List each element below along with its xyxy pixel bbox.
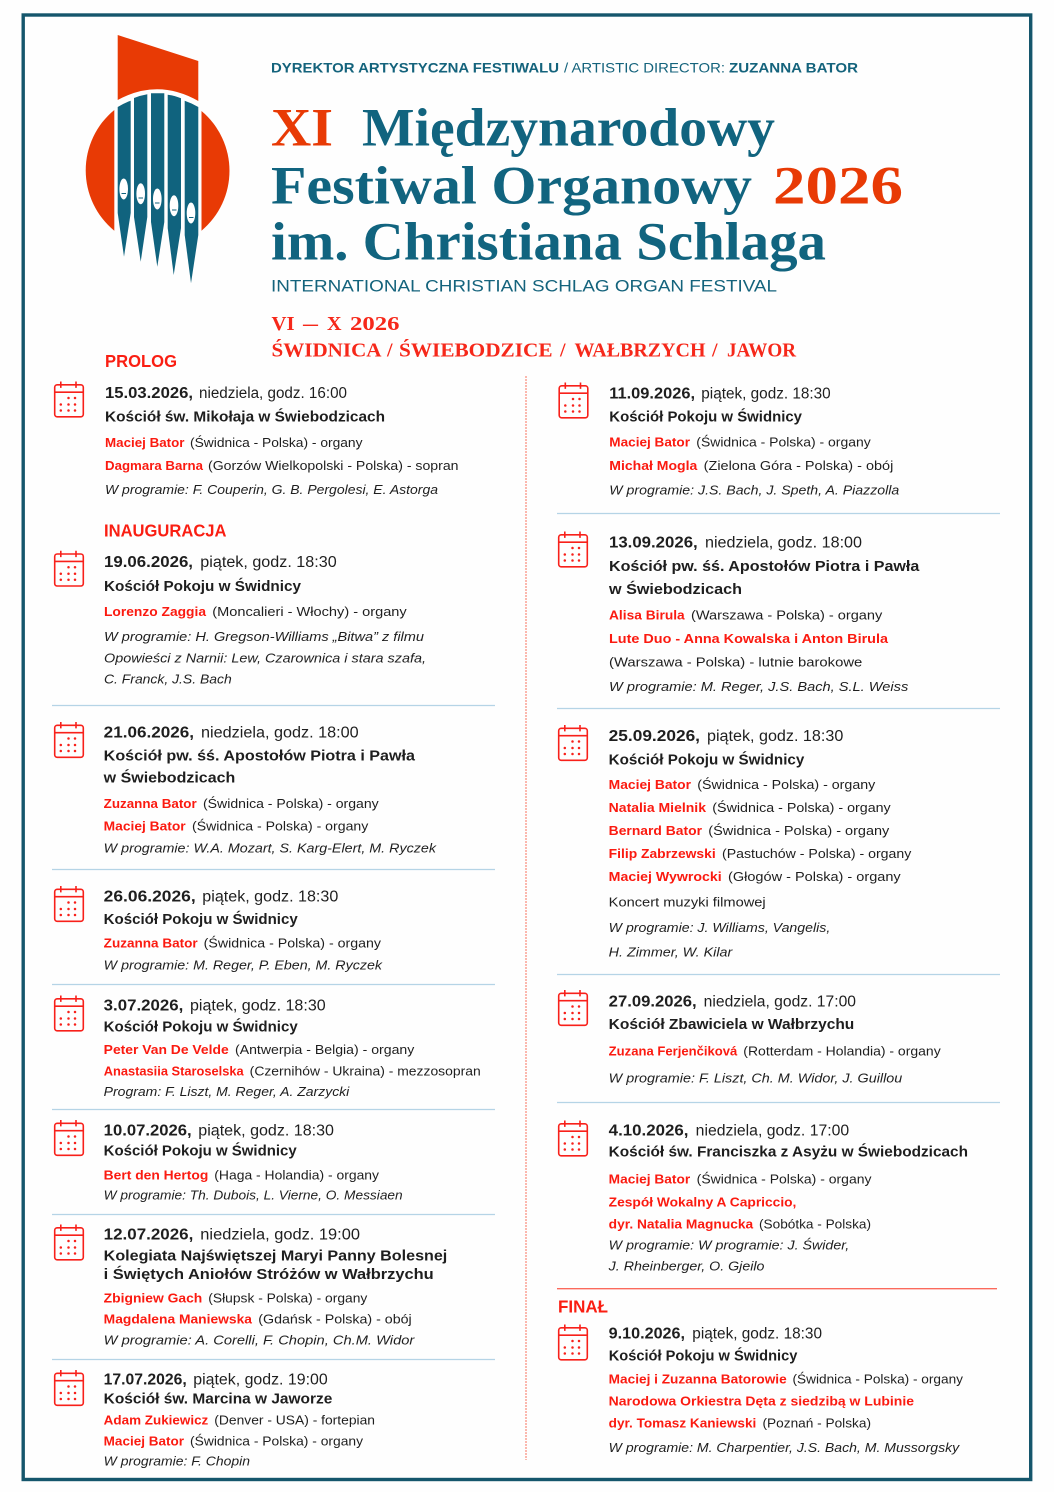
event: 15.03.2026: niedziela, godz. 16:00 bbox=[199, 385, 347, 402]
event: 26.06.2026: (Świdnica - Polska) - organy bbox=[204, 935, 382, 950]
event: 15.03.2026: (Gorzów Wielkopolski - Polska) - sopran bbox=[208, 458, 458, 473]
event: 21.06.2026: w Świebodzicach bbox=[103, 769, 235, 787]
event: 3.07.2026: Anastasiia Staroselska bbox=[104, 1063, 244, 1078]
event: 25.09.2026: W programie: J. Williams, Vangelis, bbox=[609, 920, 830, 935]
event: 11.09.2026: W programie: J.S. Bach, J. Speth, A. Piazzolla bbox=[609, 482, 899, 497]
icon: calendar bbox=[559, 725, 587, 760]
event: 4.10.2026: Maciej Bator bbox=[609, 1171, 690, 1186]
event: 10.07.2026: Kościół Pokoju w Świdnicy bbox=[104, 1142, 297, 1160]
event: 3.07.2026: piątek, godz. 18:30 bbox=[190, 998, 326, 1015]
title: 2026 bbox=[773, 155, 903, 215]
event: 13.09.2026: Lute Duo - Anna Kowalska i Anton Birula bbox=[609, 631, 889, 646]
dates and cities bbox=[272, 313, 797, 362]
icon: calendar bbox=[559, 990, 587, 1025]
event: 4.10.2026: dyr. Natalia Magnucka bbox=[609, 1216, 754, 1231]
event: 17.07.2026: (Denver - USA) - fortepian bbox=[214, 1412, 375, 1427]
dates and cities: / bbox=[559, 340, 566, 362]
event: 3.07.2026: Program: F. Liszt, M. Reger, A. Zarzycki bbox=[104, 1084, 350, 1099]
event: 3.07.2026: (Czernihów - Ukraina) - mezzosopran bbox=[250, 1063, 481, 1078]
event: 10.07.2026: piątek, godz. 18:30 bbox=[198, 1122, 334, 1139]
event: 12.07.2026: W programie: A. Corelli, F. Chopin, Ch.M. Widor bbox=[104, 1333, 415, 1348]
event: 10.07.2026: Bert den Hertog bbox=[104, 1167, 208, 1182]
event: 26.06.2026: Zuzanna Bator bbox=[104, 935, 198, 950]
event: 4.10.2026: Kościół św. Franciszka z Asyżu w Świebodzicach bbox=[609, 1143, 968, 1161]
event: 12.07.2026: Magdalena Maniewska bbox=[104, 1312, 253, 1327]
heading: INAUGURACJA: INAUGURACJA bbox=[104, 521, 227, 541]
dates and cities: WAŁBRZYCH bbox=[574, 340, 706, 362]
event: 19.06.2026 bbox=[55, 551, 426, 687]
event: 9.10.2026: Kościół Pokoju w Świdnicy bbox=[609, 1347, 798, 1365]
event: 12.07.2026: niedziela, godz. 19:00 bbox=[200, 1226, 360, 1243]
event: 3.07.2026: (Antwerpia - Belgia) - organy bbox=[235, 1042, 415, 1057]
event: 15.03.2026: Maciej Bator bbox=[105, 435, 184, 450]
event: 13.09.2026: Alisa Birula bbox=[609, 608, 686, 623]
event: 9.10.2026: 9.10.2026, bbox=[609, 1325, 685, 1342]
dates and cities: — bbox=[302, 313, 319, 335]
icon: calendar bbox=[55, 551, 83, 586]
event: 17.07.2026: Kościół św. Marcina w Jaworze bbox=[104, 1392, 332, 1408]
event: 12.07.2026: (Gdańsk - Polska) - obój bbox=[258, 1312, 412, 1327]
event: 27.09.2026: 27.09.2026, bbox=[609, 993, 697, 1010]
dates and cities: / bbox=[386, 340, 393, 362]
event: 21.06.2026: 21.06.2026, bbox=[104, 724, 194, 741]
event: 26.06.2026: 26.06.2026, bbox=[104, 888, 196, 905]
event: 21.06.2026: Zuzanna Bator bbox=[104, 796, 197, 811]
event: 9.10.2026: (Poznań - Polska) bbox=[762, 1415, 871, 1430]
event: 26.06.2026: piątek, godz. 18:30 bbox=[202, 888, 339, 905]
icon: calendar bbox=[55, 722, 83, 757]
icon: calendar bbox=[55, 886, 83, 921]
icon: calendar bbox=[55, 382, 83, 417]
event: 25.09.2026: 25.09.2026, bbox=[609, 728, 700, 745]
title: Festiwal Organowy bbox=[271, 155, 752, 215]
event: 13.09.2026: (Warszawa - Polska) - organy bbox=[691, 608, 883, 623]
event: 11.09.2026: piątek, godz. 18:30 bbox=[701, 385, 831, 402]
dates and cities: / bbox=[711, 340, 718, 362]
title: Międzynarodowy bbox=[362, 98, 775, 158]
event: 17.07.2026: W programie: F. Chopin bbox=[104, 1453, 250, 1468]
icon: calendar bbox=[55, 1370, 83, 1405]
event: 3.07.2026: 3.07.2026, bbox=[104, 998, 183, 1015]
event: 26.06.2026: W programie: M. Reger, P. Eben, M. Ryczek bbox=[104, 957, 384, 972]
event: 13.09.2026 bbox=[559, 532, 920, 694]
event: 17.07.2026: piątek, godz. 19:00 bbox=[193, 1372, 328, 1389]
event: 19.06.2026: Lorenzo Zaggia bbox=[104, 604, 207, 619]
event: 21.06.2026: W programie: W.A. Mozart, S. Karg-Elert, M. Ryczek bbox=[104, 841, 438, 856]
event: 10.07.2026 bbox=[55, 1120, 403, 1203]
event: 25.09.2026: Koncert muzyki filmowej bbox=[609, 895, 766, 910]
event: 12.07.2026: 12.07.2026, bbox=[104, 1226, 193, 1243]
event: 19.06.2026: piątek, godz. 18:30 bbox=[200, 554, 337, 571]
event: 11.09.2026 bbox=[559, 382, 899, 497]
event: 15.03.2026: 15.03.2026, bbox=[105, 385, 193, 402]
event: 11.09.2026: 11.09.2026, bbox=[609, 385, 695, 402]
event: 19.06.2026: C. Franck, J.S. Bach bbox=[104, 672, 232, 687]
event: 27.09.2026: Kościół Zbawiciela w Wałbrzychu bbox=[609, 1017, 854, 1033]
icon: calendar bbox=[559, 382, 588, 418]
heading: FINAŁ: FINAŁ bbox=[558, 1296, 608, 1316]
event: 15.03.2026: (Świdnica - Polska) - organy bbox=[190, 435, 363, 450]
dates and cities: X bbox=[327, 313, 342, 335]
logo: organ pipes over sun bbox=[86, 35, 229, 283]
title: XI bbox=[271, 98, 333, 158]
event: 25.09.2026: Maciej Wywrocki bbox=[609, 869, 722, 884]
event: 17.07.2026 bbox=[55, 1370, 375, 1468]
event: 9.10.2026: piątek, godz. 18:30 bbox=[692, 1325, 822, 1342]
dates and cities: ŚWIEBODZICE bbox=[399, 338, 552, 362]
event: 21.06.2026: Kościół pw. śś. Apostołów Piotra i Pawła bbox=[104, 748, 416, 764]
event: 27.09.2026: Zuzana Ferjenčiková bbox=[609, 1044, 738, 1059]
event: 11.09.2026: (Zielona Góra - Polska) - obój bbox=[704, 458, 893, 473]
event: 10.07.2026: (Haga - Holandia) - organy bbox=[214, 1167, 380, 1182]
event: 25.09.2026 bbox=[559, 725, 912, 959]
event: 25.09.2026: (Świdnica - Polska) - organy bbox=[708, 823, 890, 838]
title bbox=[271, 98, 903, 272]
event: 25.09.2026: Natalia Mielnik bbox=[609, 800, 707, 815]
event: 4.10.2026: (Świdnica - Polska) - organy bbox=[697, 1171, 872, 1186]
event: 25.09.2026: (Świdnica - Polska) - organy bbox=[697, 777, 876, 792]
event: 17.07.2026: Maciej Bator bbox=[104, 1433, 184, 1448]
event: 19.06.2026: 19.06.2026, bbox=[104, 554, 193, 571]
column divider bbox=[525, 376, 527, 1460]
event: 11.09.2026: (Świdnica - Polska) - organy bbox=[696, 435, 871, 450]
icon: calendar bbox=[55, 996, 83, 1031]
subtitle: INTERNATIONAL CHRISTIAN SCHLAG ORGAN FESTIVAL bbox=[271, 277, 777, 296]
event: 25.09.2026: piątek, godz. 18:30 bbox=[707, 728, 844, 745]
event: 13.09.2026: niedziela, godz. 18:00 bbox=[705, 534, 862, 551]
event: 9.10.2026: (Świdnica - Polska) - organy bbox=[792, 1372, 964, 1387]
event: 27.09.2026: niedziela, godz. 17:00 bbox=[704, 993, 856, 1010]
header: artistic director line: / ARTISTIC DIRECTOR: bbox=[564, 60, 725, 76]
icon: calendar bbox=[55, 1120, 83, 1155]
event: 4.10.2026: W programie: W programie: J. Świder, bbox=[609, 1238, 849, 1253]
event: 21.06.2026: (Świdnica - Polska) - organy bbox=[203, 796, 379, 811]
event: 10.07.2026: 10.07.2026, bbox=[104, 1122, 192, 1139]
event: 17.07.2026: (Świdnica - Polska) - organy bbox=[190, 1433, 364, 1448]
event: 25.09.2026: Bernard Bator bbox=[609, 823, 702, 838]
event: 11.09.2026: Maciej Bator bbox=[609, 435, 690, 450]
event: 10.07.2026: W programie: Th. Dubois, L. Vierne, O. Messiaen bbox=[104, 1188, 403, 1203]
event: 19.06.2026: Opowieści z Narnii: Lew, Czarownica i stara szafa, bbox=[104, 651, 426, 666]
event: 13.09.2026: Kościół pw. śś. Apostołów Piotra i Pawła bbox=[609, 559, 920, 575]
event: 25.09.2026: Filip Zabrzewski bbox=[609, 846, 716, 861]
event: 25.09.2026: (Głogów - Polska) - organy bbox=[728, 869, 901, 884]
dates and cities: ŚWIDNICA bbox=[272, 338, 382, 362]
event: 9.10.2026: dyr. Tomasz Kaniewski bbox=[609, 1415, 756, 1430]
event: 15.03.2026 bbox=[55, 382, 458, 497]
event: 4.10.2026: niedziela, godz. 17:00 bbox=[696, 1123, 850, 1140]
event: 19.06.2026: (Moncalieri - Włochy) - organy bbox=[212, 604, 407, 619]
dates and cities: 2026 bbox=[350, 313, 400, 335]
icon: calendar bbox=[55, 1224, 83, 1260]
event: 25.09.2026: Kościół Pokoju w Świdnicy bbox=[609, 750, 805, 768]
event: 4.10.2026: J. Rheinberger, O. Gjeilo bbox=[608, 1258, 764, 1273]
event: 26.06.2026: Kościół Pokoju w Świdnicy bbox=[104, 910, 298, 928]
event: 25.09.2026: (Świdnica - Polska) - organy bbox=[712, 800, 891, 815]
event: 13.09.2026: 13.09.2026, bbox=[609, 534, 698, 551]
event: 25.09.2026: H. Zimmer, W. Kilar bbox=[609, 944, 733, 959]
event: 15.03.2026: W programie: F. Couperin, G. B. Pergolesi, E. Astorga bbox=[105, 482, 438, 497]
icon: calendar bbox=[559, 1324, 587, 1360]
event: 19.06.2026: Kościół Pokoju w Świdnicy bbox=[104, 577, 302, 595]
event: 12.07.2026: Kolegiata Najświętszej Maryi Panny Bolesnej bbox=[104, 1248, 447, 1264]
header: artistic director line: DYREKTOR ARTYSTYCZNA FESTIWALU bbox=[271, 60, 559, 76]
event: 4.10.2026: Zespół Wokalny A Capriccio, bbox=[609, 1195, 796, 1210]
icon: calendar bbox=[559, 1120, 587, 1156]
event: 27.09.2026 bbox=[559, 990, 941, 1085]
event: 26.06.2026 bbox=[55, 886, 384, 972]
dates and cities: VI bbox=[272, 313, 295, 335]
header: artistic director line bbox=[271, 60, 858, 76]
title: im. Christiana Schlaga bbox=[271, 212, 826, 272]
event: 13.09.2026: w Świebodzicach bbox=[608, 580, 742, 598]
event: 21.06.2026: Maciej Bator bbox=[104, 819, 186, 834]
event: 9.10.2026 bbox=[559, 1324, 964, 1455]
event: 17.07.2026: 17.07.2026, bbox=[104, 1372, 187, 1389]
event: 4.10.2026: 4.10.2026, bbox=[609, 1123, 688, 1140]
event: 12.07.2026 bbox=[55, 1224, 447, 1348]
event: 13.09.2026: W programie: M. Reger, J.S. Bach, S.L. Weiss bbox=[609, 679, 909, 694]
event: 4.10.2026: (Sobótka - Polska) bbox=[759, 1216, 871, 1231]
event: 19.06.2026: W programie: H. Gregson-Williams „Bitwa” z filmu bbox=[104, 629, 424, 644]
event: 4.10.2026 bbox=[559, 1120, 968, 1273]
event: 21.06.2026: niedziela, godz. 18:00 bbox=[201, 724, 359, 741]
event: 25.09.2026: Maciej Bator bbox=[609, 777, 691, 792]
event: 21.06.2026: (Świdnica - Polska) - organy bbox=[192, 819, 369, 834]
event: 12.07.2026: (Słupsk - Polska) - organy bbox=[208, 1291, 368, 1306]
event: 3.07.2026: Peter Van De Velde bbox=[104, 1042, 229, 1057]
heading: PROLOG: PROLOG bbox=[105, 351, 177, 371]
event: 15.03.2026: Kościół św. Mikołaja w Świebodzicach bbox=[105, 408, 385, 426]
event: 3.07.2026: Kościół Pokoju w Świdnicy bbox=[104, 1018, 298, 1036]
event: 11.09.2026: Kościół Pokoju w Świdnicy bbox=[609, 408, 803, 426]
event: 15.03.2026: Dagmara Barna bbox=[105, 458, 204, 473]
event: 3.07.2026 bbox=[55, 996, 481, 1099]
event: 27.09.2026: W programie: F. Liszt, Ch. M. Widor, J. Guillou bbox=[609, 1070, 902, 1085]
event: 12.07.2026: i Świętych Aniołów Stróżów w Wałbrzychu bbox=[104, 1265, 434, 1283]
event: 12.07.2026: Zbigniew Gach bbox=[104, 1291, 202, 1306]
dates and cities: JAWOR bbox=[727, 340, 797, 362]
event: 11.09.2026: Michał Mogla bbox=[609, 458, 698, 473]
event: 13.09.2026: (Warszawa - Polska) - lutnie barokowe bbox=[609, 654, 862, 669]
header: artistic director line: ZUZANNA BATOR bbox=[729, 60, 858, 76]
event: 9.10.2026: Narodowa Orkiestra Dęta z siedzibą w Lubinie bbox=[609, 1394, 914, 1409]
event: 17.07.2026: Adam Zukiewicz bbox=[104, 1412, 209, 1427]
event: 25.09.2026: (Pastuchów - Polska) - organy bbox=[722, 846, 912, 861]
event: 21.06.2026 bbox=[55, 722, 438, 856]
event: 9.10.2026: W programie: M. Charpentier, J.S. Bach, M. Mussorgsky bbox=[609, 1440, 961, 1455]
icon: calendar bbox=[559, 532, 587, 567]
event: 27.09.2026: (Rotterdam - Holandia) - organy bbox=[743, 1044, 941, 1059]
event: 9.10.2026: Maciej i Zuzanna Batorowie bbox=[609, 1372, 787, 1387]
